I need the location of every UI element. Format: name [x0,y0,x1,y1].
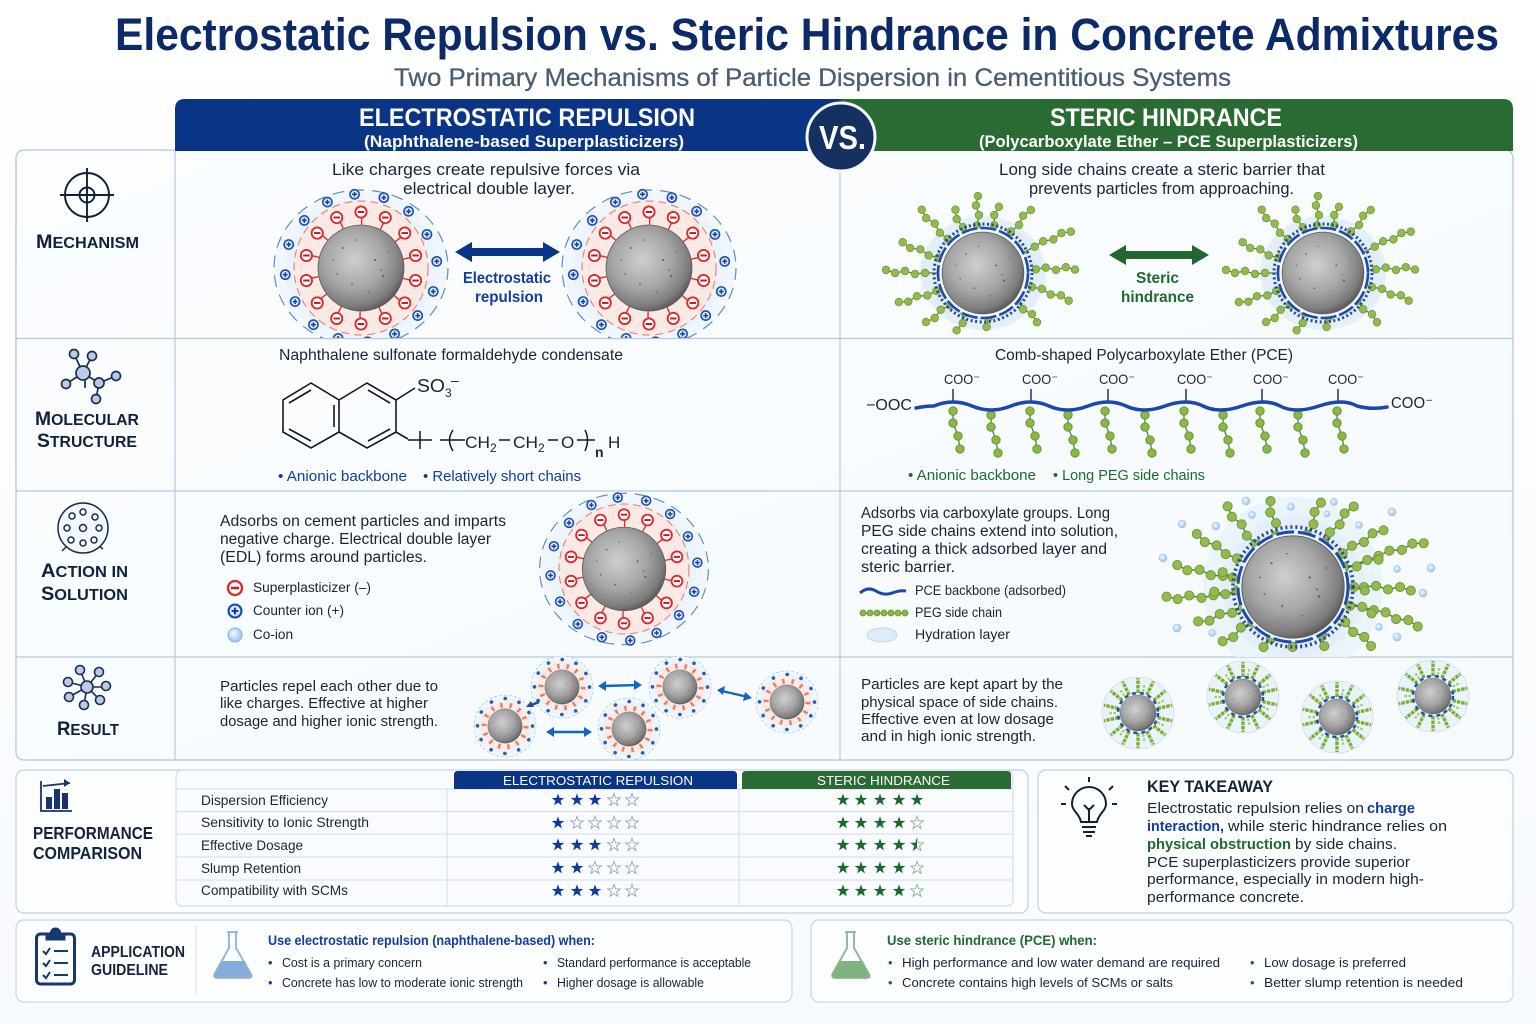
bullets: naphthalene features: • Anionic backbone [278,469,407,485]
diagram: steric particle left [882,192,1079,337]
chemical structure: naphthalene sulfonate: CH [513,433,538,452]
chemical structure: comb PCE: COO⁻ [1099,371,1135,387]
mechanism text: steric [999,160,1325,198]
guideline text: electrostatic [268,933,751,990]
heading: performance comparison [33,823,153,863]
chemical structure: naphthalene sulfonate [283,372,620,460]
row label: result: RESULT [57,718,119,740]
hydration water droplets [1159,497,1435,641]
row label: molecular structure: STRUCTURE [37,430,137,452]
row label: molecular structure: MOLECULAR [35,408,139,430]
guideline text: electrostatic: • [268,955,273,970]
row label: action in solution: SOLUTION [41,583,128,605]
bullets: PCE features [908,468,1205,484]
action text: steric: steric barrier. [861,559,955,576]
label: electrostatic repulsion [463,270,551,306]
diagram: steric adsorbed layer [1162,496,1429,657]
guideline text: steric [887,933,1463,990]
icon: network [64,666,110,710]
result text: steric: Effective even at low dosage [861,711,1054,728]
chemical structure: comb PCE: COO⁻ [1328,371,1364,387]
mechanism text: steric: Long side chains create a steric barrier that [999,160,1325,179]
chemical structure: comb PCE: COO⁻ [1177,371,1213,387]
guideline text: electrostatic: • [543,975,548,990]
result text: electrostatic: dosage and higher ionic strength. [220,713,438,730]
label: steric hindrance: hindrance [1121,289,1194,306]
diagram: repelling particles [474,656,818,760]
comparison table: Sensitivity to Ionic Strength [201,815,369,830]
column header: steric hindrance: (Polycarboxylate Ether – PCE Superplasticizers) [979,132,1358,151]
legend: charges: Counter ion (+) [253,603,344,618]
guideline text: electrostatic: • [268,975,273,990]
guideline text: electrostatic: Concrete has low to moderate ionic strength [282,975,523,990]
result text: electrostatic [220,678,438,730]
result text: electrostatic: like charges. Effective at higher [220,695,428,712]
arrow: steric hindrance [1109,245,1209,265]
legend: charges: Superplasticizer (–) [253,580,371,595]
bullets: naphthalene features [278,469,581,485]
diagram: sterically separated particles [1102,660,1469,753]
column header: electrostatic repulsion: (Naphthalene-based Superplasticizers) [364,132,684,151]
action text: electrostatic: (EDL) forms around particles. [220,549,427,566]
takeaway text: while steric hindrance relies on [1227,818,1447,835]
mechanism text: electrostatic [332,160,641,198]
heading: performance comparison: PERFORMANCE [33,823,153,843]
icon: molecule [62,350,120,404]
arrow: electrostatic repulsion [455,242,560,262]
chemical structure: comb PCE: COO⁻ [1253,371,1289,387]
result text: electrostatic: Particles repel each other due to [220,678,438,695]
chemical structure: comb PCE: COO⁻ [1022,371,1058,387]
stars: steric ratings [837,793,923,896]
comparison table: Effective Dosage [201,838,303,853]
label: electrostatic repulsion: repulsion [475,289,543,306]
action text: steric: Adsorbs via carboxylate groups. Long [861,505,1110,522]
takeaway text: charge [1367,800,1415,817]
guideline text: steric: Better slump retention is needed [1264,975,1463,990]
takeaway text: Electrostatic repulsion relies on [1147,800,1364,817]
title: Electrostatic Repulsion vs. Steric Hindrance in Concrete Admixtures [115,9,1499,60]
icon: dispersed particles in a circle [58,503,108,553]
column header: electrostatic repulsion [175,99,841,151]
action text: electrostatic: negative charge. Electrical double layer [220,531,491,548]
action text: steric: creating a thick adsorbed layer and [861,541,1107,558]
comparison table: Dispersion Efficiency [201,793,328,808]
takeaway text: physical obstruction [1147,836,1291,853]
comparison table: STERIC HINDRANCE [817,773,950,788]
comparison table [176,770,1013,906]
chemical structure: naphthalene sulfonate: H [608,433,620,452]
mechanism text: electrostatic: Like charges create repulsive forces via [332,160,641,179]
panel: key takeaway [1038,770,1513,913]
panel: application guideline, steric [811,920,1513,1002]
label: steric hindrance: Steric [1136,270,1179,287]
result text: steric: physical space of side chains. [861,694,1058,711]
label: steric hindrance [1121,270,1194,306]
diagram: steric particle right [1222,192,1419,337]
comparison table: ELECTROSTATIC REPULSION [503,773,693,788]
legend: charges: Co-ion [253,627,293,642]
column header: steric hindrance: STERIC HINDRANCE [1050,104,1282,132]
bullets: naphthalene features: • Relatively short chains [423,469,581,485]
row label: molecular structure [35,350,139,452]
chemical structure: naphthalene sulfonate: SO [417,376,445,396]
icon: target [60,168,114,222]
heading: application guideline: GUIDELINE [91,962,168,979]
action text: steric: PEG side chains extend into solution, [861,523,1118,540]
action text: electrostatic: Adsorbs on cement particles and imparts [220,513,506,530]
comparison table: Slump Retention [201,861,301,876]
takeaway text: performance concrete. [1147,889,1304,906]
legend: PCE parts: PCE backbone (adsorbed) [915,583,1066,598]
guideline text: steric: • [888,975,893,990]
chemical structure: naphthalene sulfonate: n [595,444,604,460]
chemical structure: naphthalene sulfonate: 2 [538,441,545,455]
mechanism text: electrostatic: electrical double layer. [403,179,575,198]
row label: action in solution [41,503,128,605]
chemical structure: comb PCE: COO⁻ [944,371,980,387]
VS badge: VS. [819,119,866,156]
guideline text: steric: Use steric hindrance (PCE) when: [887,933,1097,948]
chemical structure: comb PCE: −OOC [866,397,912,414]
column header: steric hindrance [841,99,1513,151]
takeaway text: PCE superplasticizers provide superior [1147,854,1410,871]
legend: PCE parts: PEG side chain [915,605,1002,620]
row label: mechanism [36,168,139,253]
result text: steric [861,676,1063,745]
bullets: PCE features: • Long PEG side chains [1053,468,1205,484]
legend: PCE parts [860,583,1066,642]
guideline text: steric: • [1250,955,1255,970]
guideline text: electrostatic: Standard performance is acceptable [557,955,751,970]
diagram: charged particle left [274,190,448,346]
structure heading: PCE: Comb-shaped Polycarboxylate Ether (PCE) [995,347,1293,364]
action text: steric [861,505,1118,576]
chemical structure: comb PCE [866,371,1433,457]
VS badge [807,103,875,171]
chemical structure: naphthalene sulfonate: 3 [445,386,452,400]
diagram: charged particle right [562,190,736,346]
panel: performance comparison [16,770,1028,913]
diagram: electrical double layer [540,493,708,645]
row label: mechanism: MECHANISM [36,231,139,253]
row label: action in solution: ACTION IN [41,560,128,582]
chemical structure: naphthalene sulfonate: O [561,433,574,452]
mechanism text: steric: prevents particles from approaching. [1029,179,1294,198]
heading: key takeaway: KEY TAKEAWAY [1147,777,1274,796]
row label: result [57,666,119,740]
heading: application guideline [91,944,185,979]
icon: clipboard checklist [36,928,74,984]
chemical structure: naphthalene sulfonate: 2 [490,441,497,455]
guideline text: steric: Concrete contains high levels of SCMs or salts [902,975,1173,990]
guideline text: electrostatic: Use electrostatic repulsion (naphthalene-based) when: [268,933,595,948]
main comparison panel [16,150,1513,760]
takeaway text: performance, especially in modern high- [1147,871,1424,888]
icon: blue flask [214,932,252,978]
guideline text: electrostatic: • [543,955,548,970]
guideline text: steric: High performance and low water demand are required [902,955,1220,970]
guideline text: steric: • [1250,975,1255,990]
icon: green flask [832,932,870,978]
icon: bar chart [41,779,72,811]
takeaway text: interaction, [1147,818,1224,835]
label: electrostatic repulsion: Electrostatic [463,270,551,287]
guideline text: steric: • [888,955,893,970]
chemical structure: naphthalene sulfonate: CH [465,433,490,452]
legend: PCE parts: Hydration layer [915,627,1011,642]
action text: electrostatic [220,513,506,566]
guideline text: electrostatic: Cost is a primary concern [282,955,422,970]
guideline text: electrostatic: Higher dosage is allowable [557,975,704,990]
result text: steric: and in high ionic strength. [861,728,1036,745]
bullets: PCE features: • Anionic backbone [908,468,1036,484]
heading: application guideline: APPLICATION [91,944,185,961]
column header: electrostatic repulsion: ELECTROSTATIC REPULSION [359,104,695,132]
subtitle: Two Primary Mechanisms of Particle Dispersion in Cementitious Systems [394,64,1231,92]
heading: performance comparison: COMPARISON [33,843,142,863]
chemical structure: comb PCE: COO⁻ [1391,395,1433,412]
structure heading: naphthalene: Naphthalene sulfonate formaldehyde condensate [279,347,623,364]
takeaway text [1147,800,1447,906]
legend: charges [228,580,371,642]
comparison table: Compatibility with SCMs [201,883,348,898]
icon: light bulb [1061,777,1117,836]
chemical structure: naphthalene sulfonate: – [451,372,459,388]
guideline text: steric: Low dosage is preferred [1264,955,1406,970]
takeaway text: by side chains. [1295,836,1397,853]
panel: application guideline, electrostatic [16,920,792,1002]
stars: electrostatic ratings [552,793,638,896]
result text: steric: Particles are kept apart by the [861,676,1063,693]
